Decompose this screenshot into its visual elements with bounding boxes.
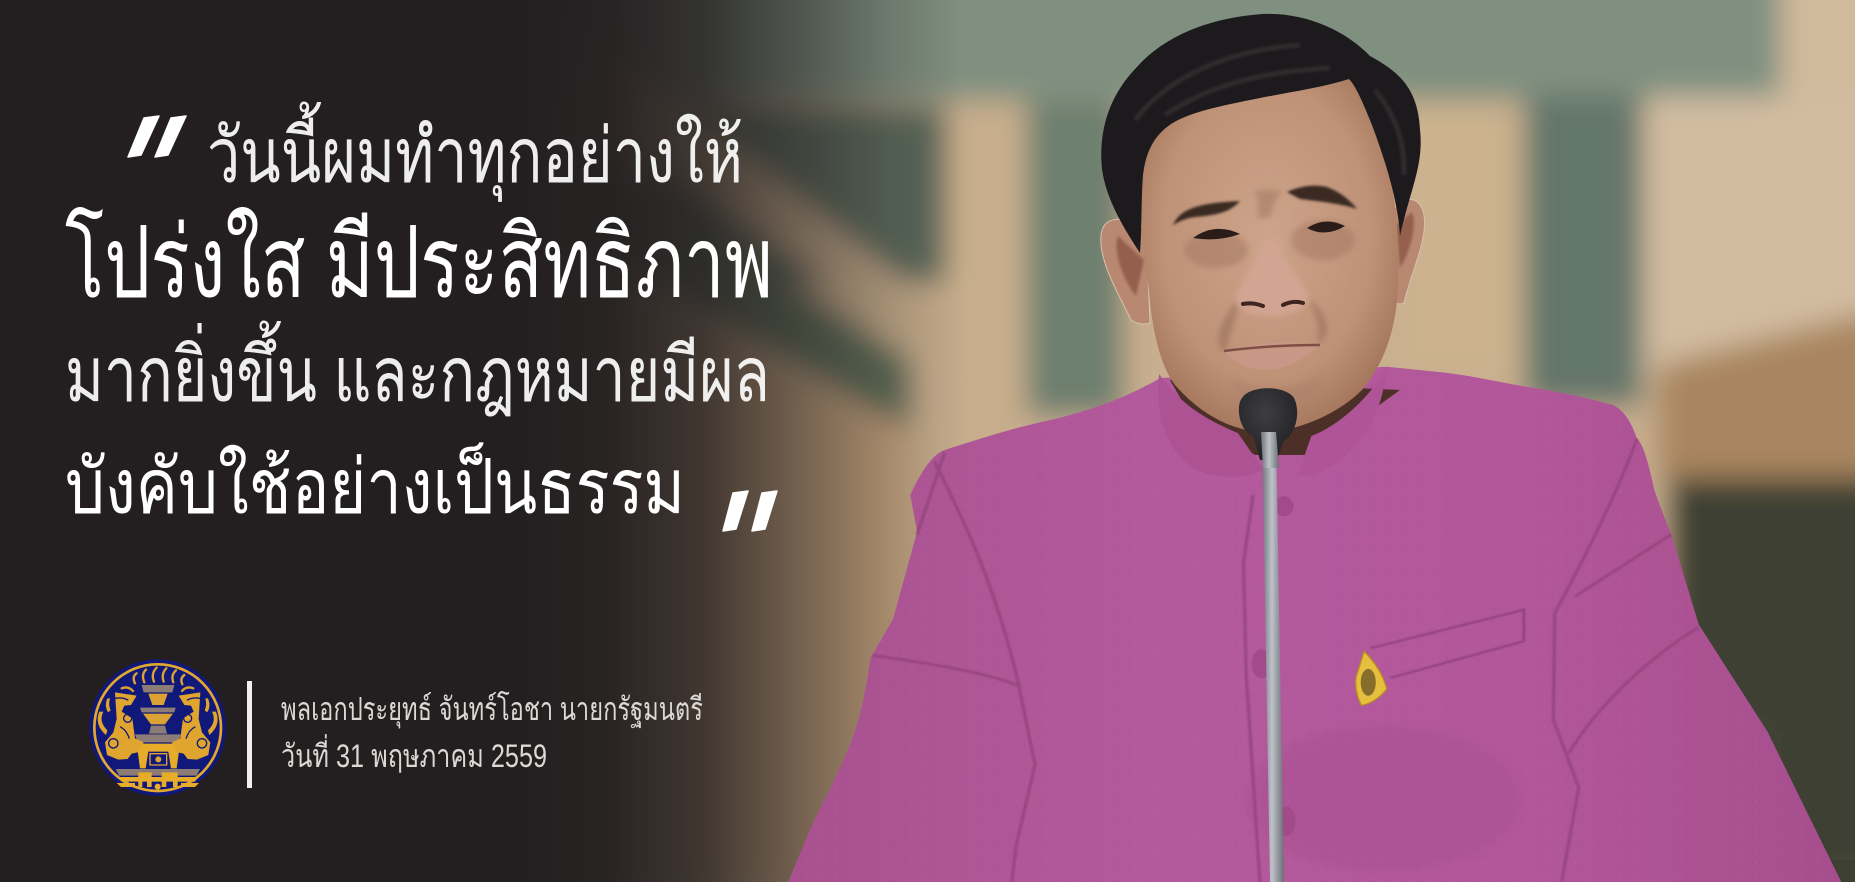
flames bbox=[122, 668, 193, 691]
urn bbox=[135, 685, 181, 742]
base bbox=[116, 769, 200, 790]
ear right bbox=[1392, 199, 1425, 304]
lion left bbox=[98, 692, 144, 760]
quote: closing mark bbox=[723, 491, 777, 531]
pedestal bbox=[137, 744, 180, 768]
neck shadow bbox=[1170, 380, 1400, 455]
line 4: บังคับใช้อย่างเป็นธรรม bbox=[65, 442, 685, 530]
lapel pin bbox=[1356, 651, 1387, 705]
quote: opening mark bbox=[128, 116, 186, 157]
icon: cabinet secretariat seal bbox=[89, 659, 226, 796]
jacket texture bbox=[788, 367, 1841, 882]
face shading bbox=[1184, 190, 1355, 404]
photo: speaker at microphone bbox=[788, 14, 1841, 882]
speaker name: พลเอกประยุทธ์ จันทร์โอชา นายกรัฐมนตรี bbox=[281, 691, 703, 729]
line 1: วันนี้ผมทำทุกอย่างให้ bbox=[207, 101, 743, 202]
eyes bbox=[1193, 221, 1345, 239]
jacket folds bbox=[873, 439, 1699, 882]
hair bbox=[1101, 14, 1421, 253]
jacket collar bbox=[1158, 367, 1387, 477]
eyebrows bbox=[1173, 186, 1357, 225]
line 2: โปร่งใส มีประสิทธิภาพ bbox=[65, 207, 773, 319]
line 3: มากยิ่งขึ้น และกฎหมายมีผล bbox=[65, 320, 770, 418]
face bbox=[1136, 70, 1398, 432]
jacket bbox=[788, 367, 1841, 882]
lips bbox=[1224, 343, 1320, 370]
microphone bbox=[1239, 388, 1297, 882]
hair highlights bbox=[1135, 45, 1404, 175]
nose bbox=[1236, 240, 1308, 316]
lion right bbox=[172, 692, 218, 760]
attribution bbox=[281, 691, 703, 774]
quote text bbox=[65, 101, 773, 530]
ear left bbox=[1101, 219, 1150, 324]
buttons bbox=[1252, 496, 1296, 836]
vertical divider bbox=[247, 681, 252, 788]
date: วันที่ 31 พฤษภาคม 2559 bbox=[281, 734, 547, 774]
